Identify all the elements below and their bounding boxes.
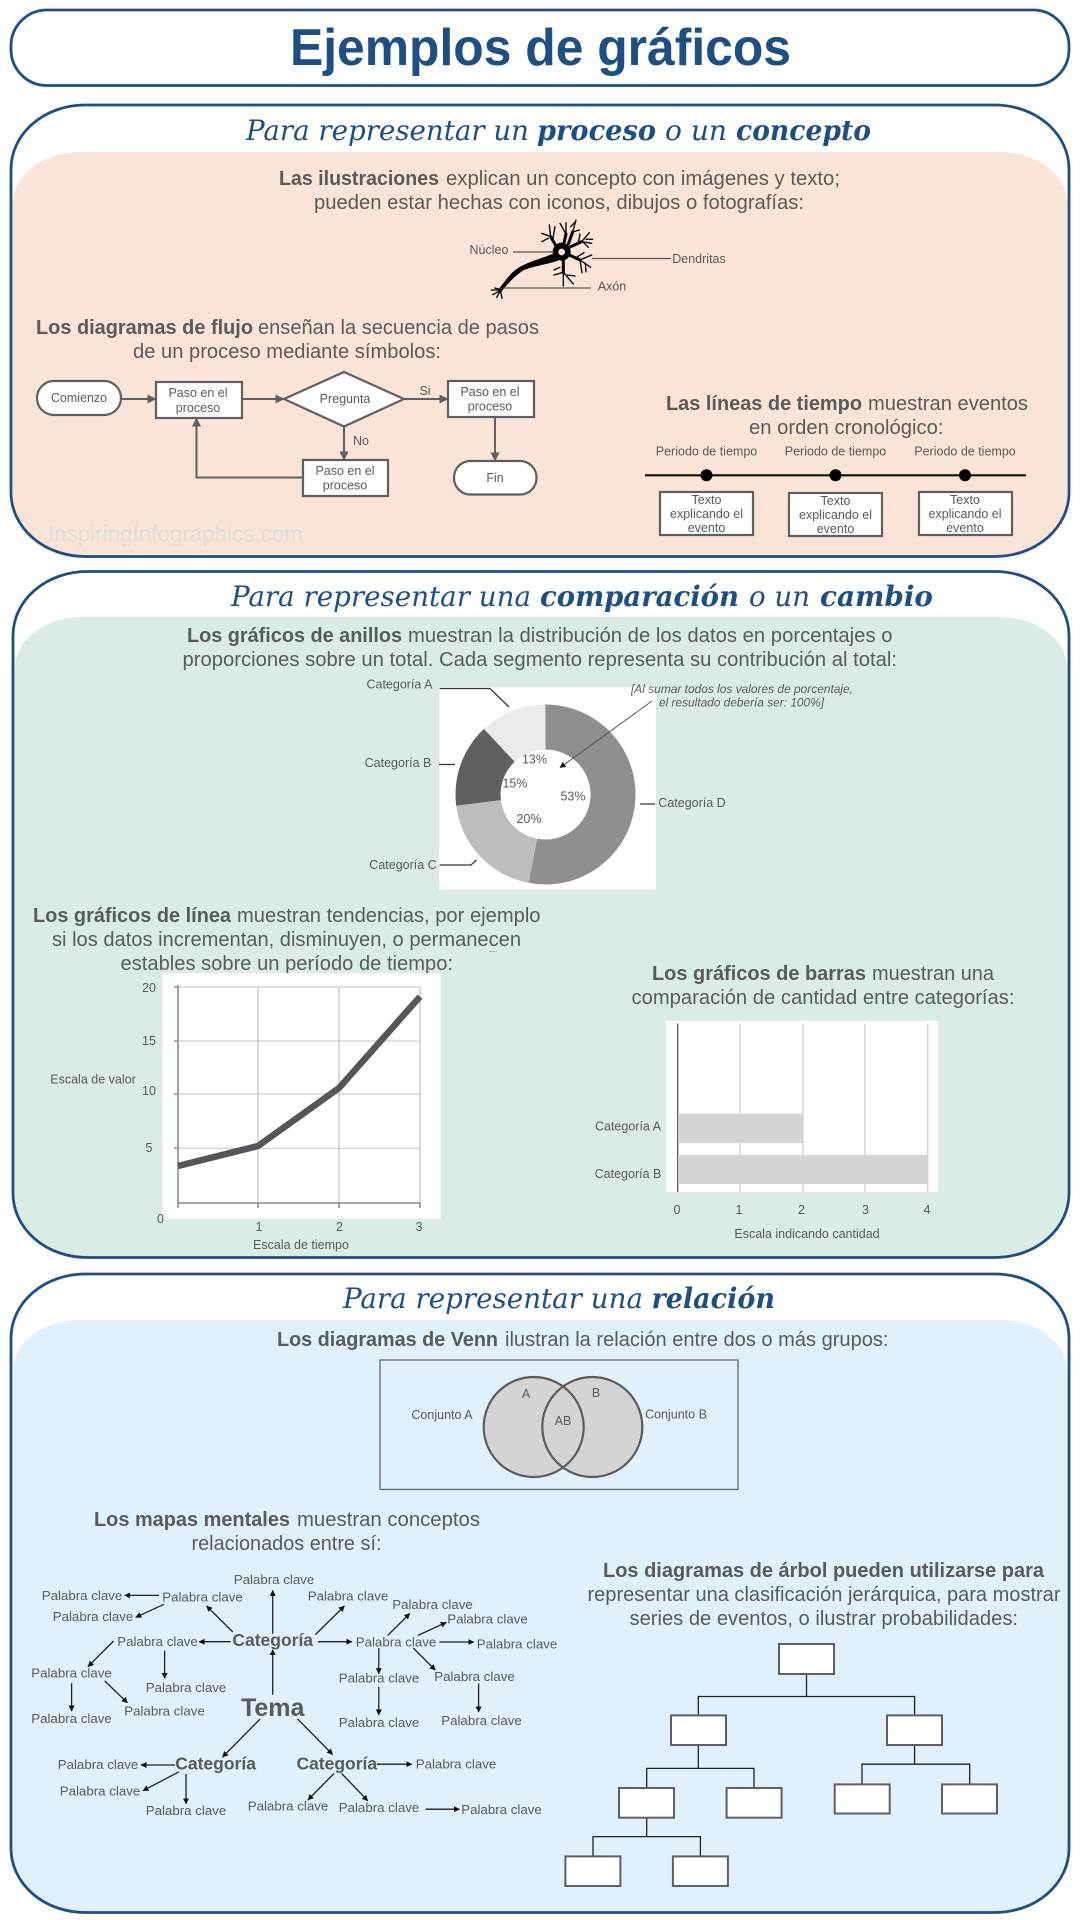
keywords: Palabra clave	[146, 1803, 226, 1818]
label: Categoría D: Categoría D	[658, 796, 726, 810]
central topic: Tema	[241, 1694, 306, 1722]
donut chart: 20%	[516, 812, 542, 826]
panel background: relación	[13, 1320, 1067, 1912]
bar chart: 3	[862, 1203, 869, 1217]
heading: proceso o concepto	[245, 114, 871, 147]
keywords: Palabra clave	[60, 1784, 140, 1798]
text: gráficos de barras: comparación de cantidad entre categorías:	[632, 987, 1014, 1009]
bar chart	[595, 1021, 938, 1241]
categories: Categoría	[232, 1630, 313, 1650]
line chart: 0	[157, 1212, 164, 1226]
keywords: Palabra clave	[234, 1572, 314, 1587]
keywords: Palabra clave	[117, 1634, 198, 1649]
timeline: evento	[946, 521, 984, 535]
keywords: Palabra clave	[392, 1597, 473, 1612]
step: Paso 3: Paso en el	[315, 464, 375, 478]
keywords	[31, 1572, 557, 1818]
text: diagramas de Venn	[277, 1329, 888, 1351]
bar chart: 4	[924, 1203, 931, 1217]
text: gráficos de barras: Los gráficos de barras	[652, 963, 866, 985]
keywords: Palabra clave	[477, 1636, 557, 1652]
label: Categoría B: Categoría B	[365, 756, 431, 770]
label: Dendritas: Dendritas	[672, 252, 726, 266]
step: Paso 2: Paso en el	[460, 385, 520, 399]
tree diagram	[565, 1644, 997, 1886]
label: Si: Si	[419, 384, 431, 398]
categories: Categoría	[296, 1753, 377, 1773]
text: ilustraciones: Las ilustraciones	[279, 168, 439, 190]
panel: proceso o concepto	[11, 105, 1069, 556]
bar chart: Categoría B	[595, 1167, 661, 1181]
bar B	[678, 1155, 928, 1184]
heading: proceso o concepto: o un	[665, 114, 727, 147]
heading: proceso o concepto: proceso	[537, 114, 656, 147]
neuron drawing	[491, 220, 593, 298]
keywords: Palabra clave	[339, 1715, 419, 1730]
text: mapas mentales: relacionados entre sí:	[192, 1533, 382, 1555]
timeline: Periodo de tiempo	[785, 444, 886, 458]
heading: relación: Para representar una	[342, 1282, 643, 1315]
panel: relación	[11, 1274, 1069, 1912]
text: mapas mentales: Los mapas mentales	[94, 1509, 290, 1531]
text: diagramas de flujo: Los diagramas de flujo	[36, 317, 253, 339]
panel outline: relación	[11, 1274, 1069, 1912]
keywords: Palabra clave	[146, 1680, 226, 1695]
keywords: Palabra clave	[441, 1713, 522, 1728]
segment A 13%	[484, 704, 546, 762]
heading: comparación o cambio	[230, 580, 933, 613]
Venn diagram: AB	[555, 1414, 571, 1428]
timeline: explicando el	[670, 507, 743, 521]
step: Pregunta: Pregunta	[320, 392, 370, 406]
axis title: cantidad: Escala indicando cantidad	[734, 1227, 880, 1241]
note: suma 100%: el resultado debería ser: 100%]	[659, 698, 825, 710]
text: diagramas de Venn: ilustran la relación entre dos o más grupos:	[505, 1329, 888, 1351]
keywords: Palabra clave	[416, 1756, 496, 1772]
label: No: No	[353, 434, 369, 448]
step: Pregunta	[284, 372, 404, 426]
text: gráficos de anillos: proporciones sobre un total. Cada segmento representa su contribución al total:	[182, 649, 897, 671]
small mark	[489, 950, 497, 952]
heading: comparación o cambio: o un	[749, 580, 810, 613]
categories	[175, 1630, 377, 1773]
mind map arrows	[72, 1590, 479, 1809]
keywords: Palabra clave	[248, 1798, 328, 1814]
timeline: Periodo de tiempo	[914, 444, 1016, 458]
text: diagramas de flujo	[36, 317, 539, 363]
flowchart	[37, 372, 536, 496]
Venn diagram: B	[592, 1386, 600, 1400]
text: gráficos de línea: muestran tendencias, por ejemplo	[237, 905, 540, 927]
step: Paso 3: proceso	[323, 478, 367, 492]
step: Paso 3	[303, 460, 388, 496]
segment B 15%	[455, 729, 515, 806]
text: gráficos de anillos	[182, 625, 897, 671]
text: diagramas de árbol	[588, 1560, 1061, 1630]
title banner	[11, 10, 1069, 86]
panel outline: proceso	[11, 105, 1069, 556]
line chart: 1	[256, 1220, 263, 1234]
keywords: Palabra clave	[124, 1704, 205, 1718]
panel background: comparación	[15, 617, 1067, 1257]
illustration: neuron	[470, 220, 726, 298]
bar chart: 2	[798, 1203, 805, 1217]
text: líneas de tiempo: muestran eventos	[868, 393, 1028, 415]
segment C 20%	[456, 800, 537, 883]
text: líneas de tiempo: en orden cronológico:	[749, 417, 944, 439]
donut chart: 15%	[502, 776, 528, 790]
donut chart	[365, 678, 853, 890]
line chart: 10	[142, 1084, 156, 1098]
Venn diagram	[380, 1360, 738, 1489]
keywords: Palabra clave	[31, 1666, 112, 1680]
title banner: Ejemplos de gráficos	[290, 19, 791, 77]
text: gráficos de línea	[33, 905, 540, 975]
timeline	[645, 444, 1026, 536]
keywords: Palabra clave	[447, 1612, 528, 1626]
donut chart: 53%	[560, 790, 586, 804]
text: diagramas de árbol: representar una clasificación jerárquica, para mostrar	[588, 1584, 1061, 1606]
text: mapas mentales: muestran conceptos	[297, 1509, 480, 1531]
text: gráficos de anillos: muestran la distribución de los datos en porcentajes o	[408, 625, 892, 647]
keywords: Palabra clave	[461, 1802, 542, 1817]
timeline: Texto	[821, 494, 850, 508]
neuron label lines	[503, 252, 671, 288]
segment D 53%	[529, 704, 635, 884]
step: Comienzo: Comienzo	[51, 391, 107, 405]
arrow: nota al centro	[560, 701, 652, 768]
step: Paso 1: proceso	[176, 401, 220, 415]
line chart: 5	[146, 1141, 153, 1155]
keywords: Palabra clave	[339, 1670, 419, 1686]
timeline: explicando el	[799, 508, 872, 522]
step: Fin	[454, 461, 536, 494]
panel outline: comparación	[13, 572, 1069, 1258]
text: ilustraciones: explican un concepto con imágenes y texto;	[446, 168, 840, 190]
bar chart: Categoría A	[595, 1120, 662, 1134]
label: Categoría C: Categoría C	[369, 858, 437, 872]
keywords: Palabra clave	[58, 1757, 138, 1772]
text: gráficos de línea: si los datos incrementan, disminuyen, o permanecen	[52, 929, 521, 951]
label: Núcleo: Núcleo	[470, 243, 508, 257]
line chart: 3	[416, 1220, 423, 1234]
heading: comparación o cambio: Para representar una	[230, 580, 531, 613]
timeline: Texto	[692, 493, 721, 507]
text: ilustraciones: pueden estar hechas con iconos, dibujos o fotografías:	[314, 192, 804, 214]
heading: relación	[342, 1282, 775, 1315]
donut leader lines	[439, 688, 655, 865]
text: gráficos de línea: Los gráficos de línea	[33, 905, 232, 927]
keywords: Palabra clave	[31, 1711, 112, 1726]
Venn diagram: A	[522, 1387, 531, 1401]
step: Paso 1: Paso en el	[168, 386, 228, 400]
Venn diagram: Conjunto A	[411, 1408, 473, 1422]
flowchart arrows	[121, 399, 495, 478]
timeline: explicando el	[929, 507, 1001, 521]
keywords: Palabra clave	[308, 1588, 388, 1604]
step: Fin: Fin	[486, 471, 504, 485]
keywords: Palabra clave	[356, 1634, 436, 1650]
donut chart: 13%	[522, 752, 547, 766]
text: diagramas de flujo: enseñan la secuencia de pasos	[258, 317, 539, 339]
heading: relación: relación	[652, 1282, 775, 1315]
keywords: Palabra clave	[162, 1590, 243, 1604]
text: gráficos de barras	[632, 963, 1014, 1009]
bar chart: 0	[674, 1203, 681, 1217]
label: Axón: Axón	[598, 280, 626, 294]
line chart: 2	[336, 1220, 343, 1234]
keywords: Palabra clave	[53, 1609, 133, 1624]
timeline: Texto	[950, 493, 980, 507]
heading: comparación o cambio: cambio	[820, 580, 933, 613]
heading: proceso o concepto: concepto	[736, 114, 871, 147]
keywords: Palabra clave	[42, 1588, 122, 1603]
keywords: Palabra clave	[434, 1669, 515, 1684]
text: diagramas de árbol: series de eventos, o ilustrar probabilidades:	[630, 1608, 1018, 1630]
text: gráficos de anillos: Los gráficos de anillos	[187, 625, 402, 647]
text: gráficos de línea: estables sobre un período de tiempo:	[120, 953, 453, 975]
panel: comparación o cambio	[13, 572, 1069, 1258]
text: diagramas de árbol: Los diagramas de árbol pueden utilizarse para	[603, 1560, 1045, 1582]
watermark: InspiringInfographics.com	[48, 520, 303, 546]
text: líneas de tiempo: Las líneas de tiempo	[666, 393, 862, 415]
text: gráficos de barras: muestran una	[872, 963, 995, 985]
heading: proceso o concepto: Para representar un	[245, 114, 529, 147]
mind map	[31, 1572, 557, 1818]
data line	[178, 997, 420, 1166]
heading: comparación o cambio: comparación	[540, 580, 739, 613]
bar A	[678, 1114, 803, 1143]
text: ilustraciones	[279, 168, 840, 214]
step: Paso 1	[156, 382, 242, 418]
label: Categoría A: Categoría A	[366, 678, 433, 692]
axis title: valor: Escala de valor	[50, 1072, 136, 1086]
text: líneas de tiempo	[666, 393, 1028, 439]
line chart: 20	[142, 981, 156, 995]
timeline: Periodo de tiempo	[656, 444, 757, 458]
Venn diagram: Conjunto B	[645, 1408, 707, 1422]
bar chart: 1	[736, 1203, 743, 1217]
text: diagramas de Venn: Los diagramas de Venn	[277, 1329, 498, 1351]
text: diagramas de flujo: de un proceso mediante símbolos:	[133, 341, 441, 363]
note: suma 100%: [Al sumar todos los valores de porcentaje,	[630, 684, 853, 696]
line chart: 15	[142, 1034, 156, 1048]
note: suma 100%	[630, 684, 853, 710]
axis title: tiempo: Escala de tiempo	[253, 1238, 349, 1252]
step: Paso 2	[448, 381, 534, 417]
timeline: evento	[817, 522, 854, 536]
text: mapas mentales	[94, 1509, 480, 1555]
categories: Categoría	[175, 1753, 256, 1773]
step: Paso 2: proceso	[468, 400, 512, 414]
step: Comienzo	[37, 381, 121, 415]
line chart	[50, 973, 440, 1252]
keywords: Palabra clave	[339, 1800, 419, 1815]
panel background: proceso	[13, 152, 1067, 556]
timeline: evento	[688, 521, 725, 535]
